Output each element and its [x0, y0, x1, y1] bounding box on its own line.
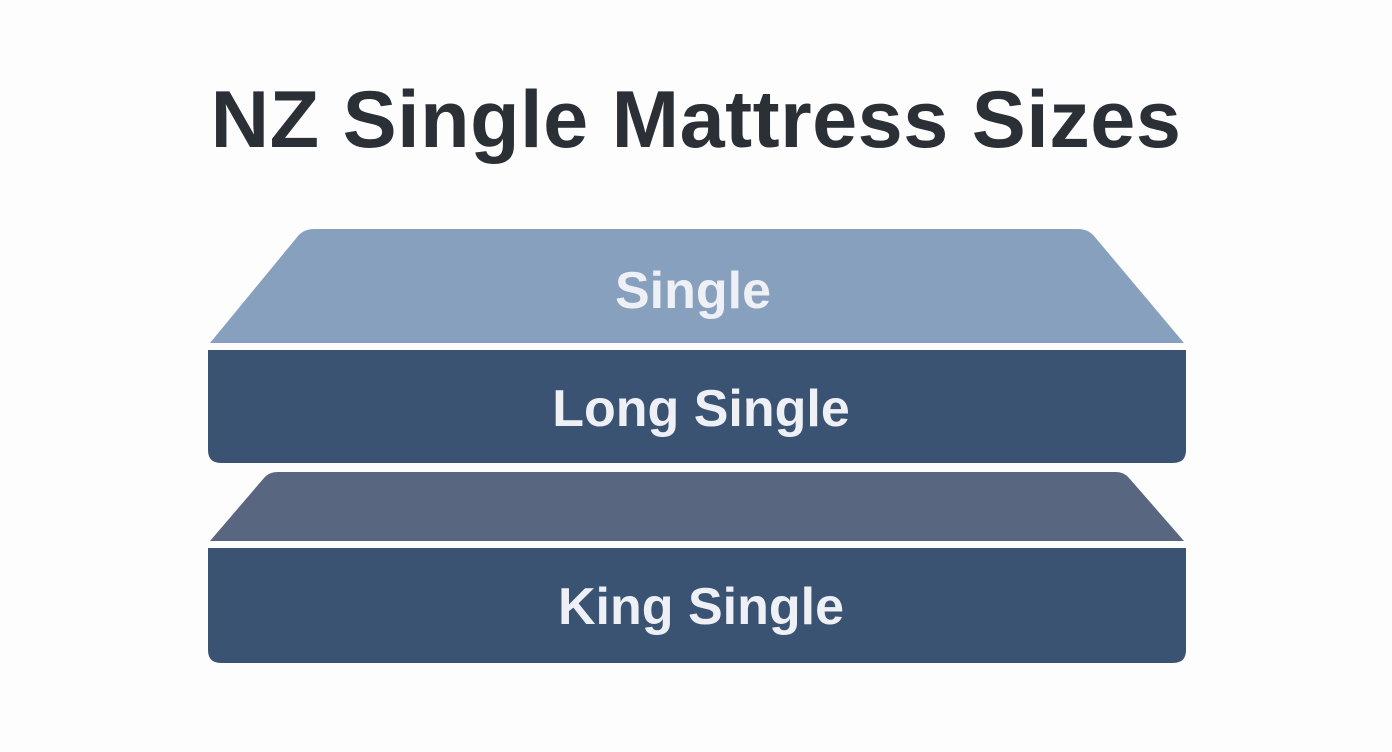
mattress: long single band: Long Single — [552, 380, 850, 438]
mattress: king single top — [210, 472, 1184, 541]
mattress: single top — [210, 229, 1184, 343]
title: NZ Single Mattress Sizes — [211, 75, 1181, 165]
mattress: king single band — [208, 548, 1186, 663]
mattress: long single band — [208, 350, 1186, 463]
mattress: king single band: King Single — [558, 578, 844, 636]
mattress: single top: Single — [615, 262, 771, 320]
